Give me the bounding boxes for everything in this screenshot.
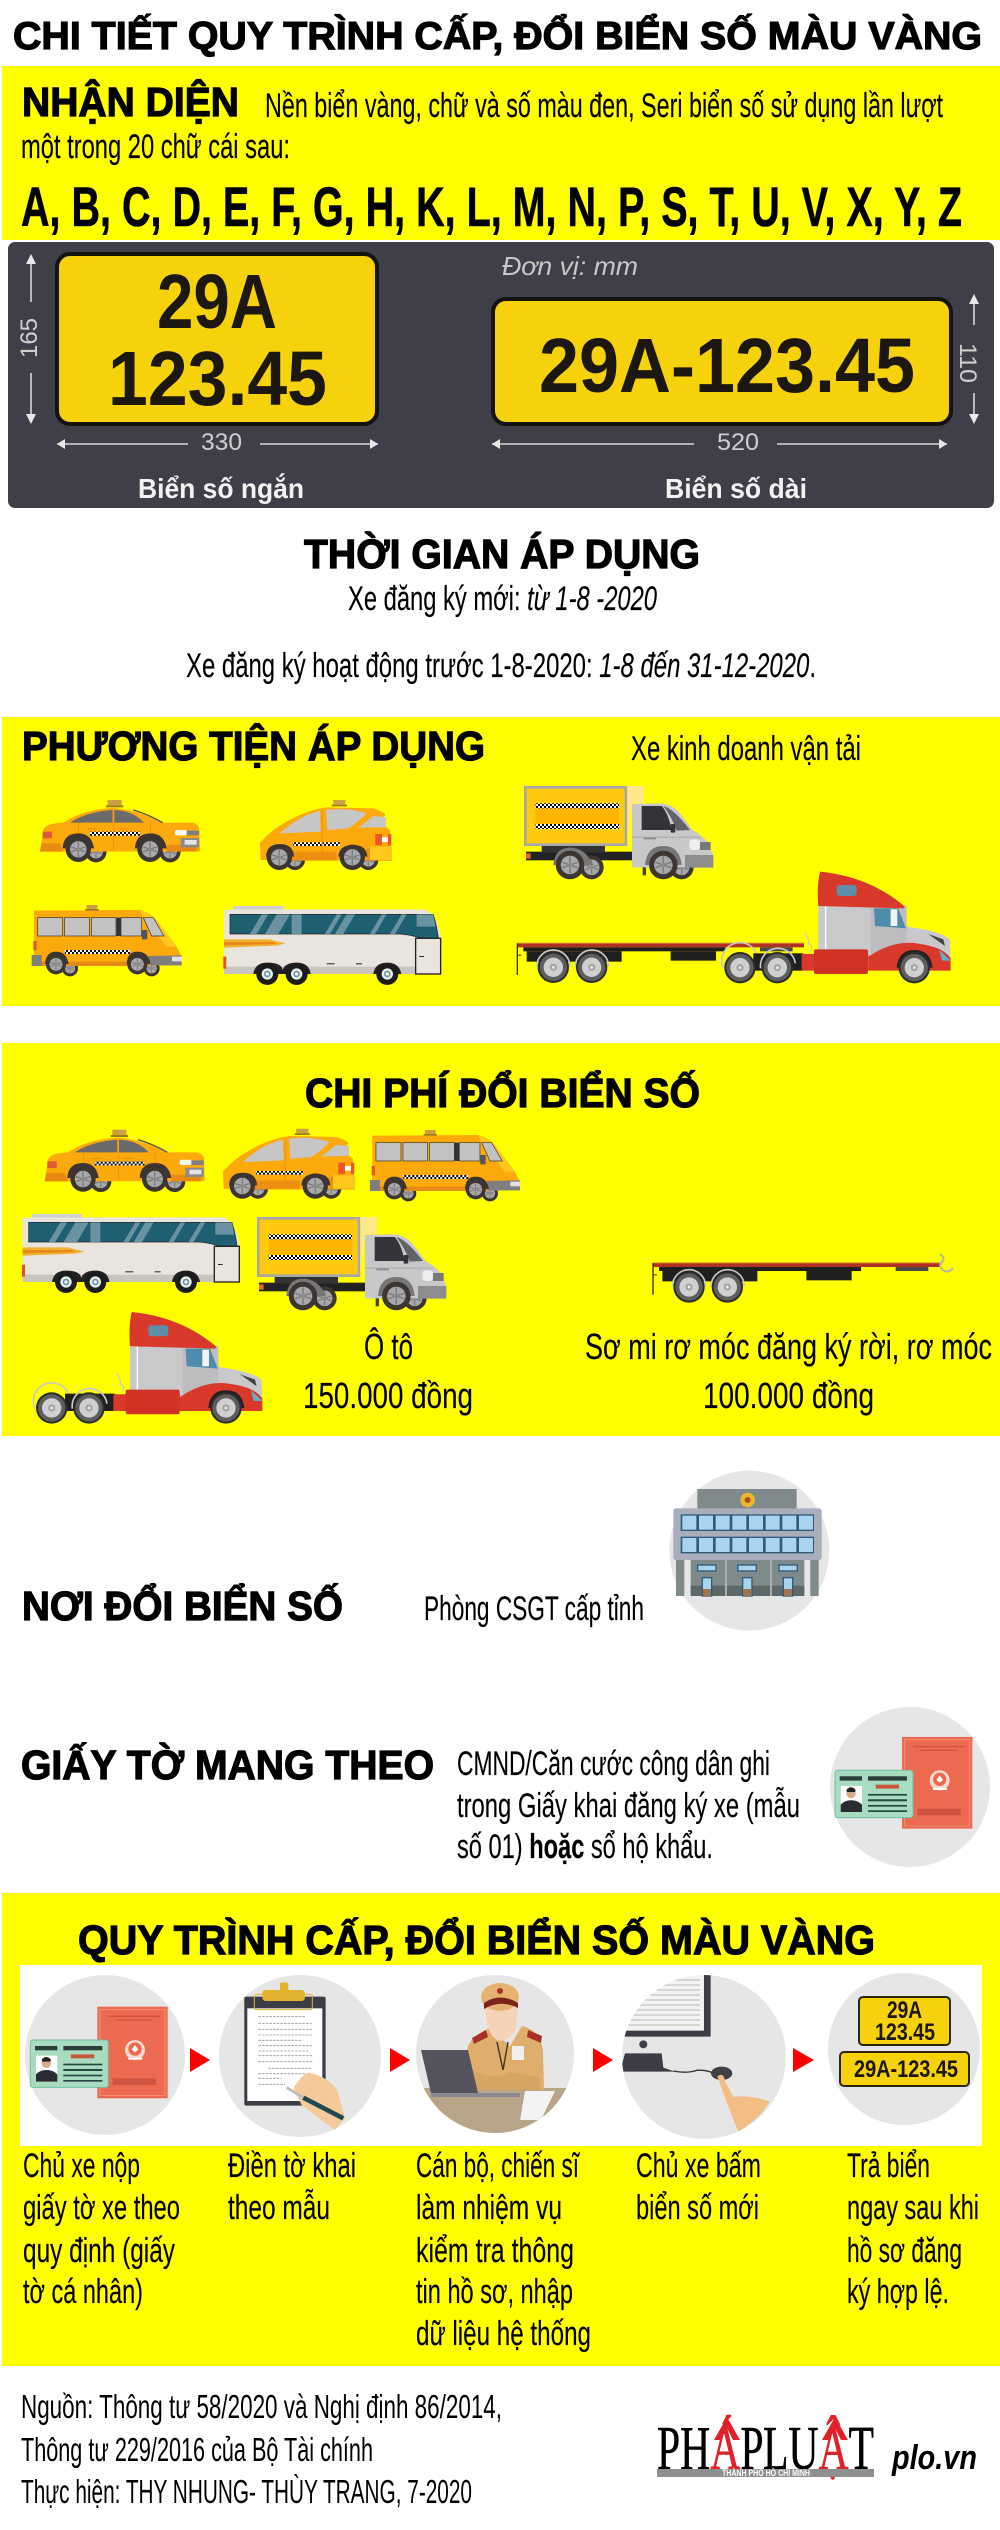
text: step 4: [636, 2147, 761, 2227]
footer: sources and credits: Thực hiện: THY NHUNG- THÙY TRANG, 7-2020: [21, 2473, 472, 2510]
text: step 1: giấy tờ xe theo: [23, 2189, 180, 2227]
step 5 icon: new yellow plates: 123.45: [875, 2019, 935, 2046]
long plate: [493, 299, 951, 424]
text: new registration: Xe đăng ký mới: từ 1-8 -2020: [348, 580, 657, 618]
text: step 4: biển số mới: [636, 2189, 759, 2227]
step 5 icon: new yellow plates: 29A-123.45: [854, 2056, 958, 2083]
text: provincial traffic police: Phòng CSGT cấp tỉnh: [424, 1590, 644, 1628]
heading: applicable vehicles: PHƯƠNG TIỆN ÁP DỤNG: [22, 723, 485, 769]
panel: plate change fees: [2, 1043, 1000, 1436]
text: step 2: Điền tờ khai: [228, 2147, 356, 2185]
dimension: 330: 330: [201, 429, 242, 456]
dimension: 165: 165: [16, 318, 43, 358]
caption: long plate: Biển số dài: [665, 473, 807, 504]
long plate: 29A-123.45: [539, 323, 915, 409]
text: step 3: kiểm tra thông: [416, 2232, 574, 2270]
text: step 3: làm nhiệm vụ: [416, 2189, 562, 2227]
icon: semi truck with trailer: [517, 872, 951, 983]
icon: taxi sedan: [45, 1130, 205, 1192]
heading: effective dates: THỜI GIAN ÁP DỤNG: [304, 531, 700, 577]
text: step 2: theo mẫu: [228, 2189, 330, 2227]
text: documents description: CMND/Căn cước công dân ghi: [457, 1745, 770, 1783]
icon: police building: [669, 1471, 829, 1631]
step 3 icon: officer at laptop: [416, 1975, 574, 2138]
heading: procedure: QUY TRÌNH CẤP, ĐỔI BIỂN SỐ MÀU VÀNG: [78, 1916, 875, 1963]
icon: taxi van: [370, 1130, 520, 1201]
panel: procedure: [2, 1893, 1000, 2366]
text: step 2: [228, 2147, 356, 2227]
heading: identification: NHẬN DIỆN: [22, 79, 239, 125]
step 1 icon: documents: [25, 1975, 185, 2135]
step 5 icon: new yellow plates: [828, 1973, 980, 2125]
dimension: 165: [16, 254, 43, 424]
panel: plate dimensions: [8, 242, 994, 508]
footer: sources and credits: Thông tư 229/2016 của Bộ Tài chính: [21, 2431, 373, 2468]
text: step 1: tờ cá nhân): [23, 2273, 143, 2311]
fee: trailers: 100.000 đồng: [703, 1375, 874, 1416]
text: documents description: trong Giấy khai đăng ký xe (mẫu: [457, 1787, 800, 1825]
section: effective dates: [186, 531, 816, 685]
icon: taxi van: [32, 905, 182, 976]
panel: identification: [2, 66, 1000, 240]
logo: Pháp Luật: PHÁP LUẬT: [657, 2415, 874, 2483]
step 4 icon: pressing the plate button: [620, 1975, 786, 2139]
dimension: 330: [57, 429, 378, 456]
short plate: 29A: [157, 259, 277, 345]
fee: trailers: [585, 1326, 992, 1416]
text: identification description: [21, 87, 943, 166]
fee: cars: Ô tô: [364, 1326, 413, 1367]
text: identification description: một trong 20 chữ cái sau:: [21, 128, 290, 166]
logo: plo.vn: plo.vn: [891, 2439, 977, 2477]
caption: short plate: Biển số ngắn: [138, 473, 304, 504]
arrow: [390, 2048, 410, 2072]
text: transport business vehicles: Xe kinh doanh vận tải: [631, 730, 861, 768]
section: documents to bring: [21, 1707, 990, 1867]
dimension: 520: [492, 429, 947, 456]
icon: taxi sedan: [40, 800, 200, 862]
icon: coach bus: [22, 1214, 239, 1293]
text: earlier registration: Xe đăng ký hoạt động trước 1-8-2020: 1-8 đến 31-12-2020.: [186, 647, 816, 685]
text: step 3: [416, 2147, 591, 2353]
unit label: Đơn vị: mm: [502, 251, 638, 281]
arrow: [793, 2048, 814, 2072]
logo: Pháp Luật: THÀNH PHỐ HỒ CHÍ MINH: [722, 2467, 810, 2478]
heading: where: NƠI ĐỔI BIỂN SỐ: [22, 1582, 343, 1629]
heading: documents: GIẤY TỜ MANG THEO: [21, 1742, 434, 1788]
main title: CHI TIẾT QUY TRÌNH CẤP, ĐỔI BIỂN SỐ MÀU VÀNG: [13, 13, 982, 58]
text: step 5: ký hợp lệ.: [847, 2273, 949, 2311]
text: documents description: [457, 1745, 800, 1866]
heading: fees: CHI PHÍ ĐỔI BIỂN SỐ: [305, 1069, 700, 1116]
text: documents description: số 01) hoặc sổ hộ khẩu.: [457, 1828, 713, 1866]
icon: coach bus: [223, 906, 441, 985]
panel: applicable vehicles: [2, 717, 1000, 1006]
text: step 5: [847, 2147, 979, 2311]
icon: tractor cab: [33, 1312, 262, 1424]
icon: ID card and household book: [830, 1707, 990, 1867]
icon: taxi hatchback: [260, 800, 392, 870]
icon: box truck: [258, 1217, 446, 1310]
arrow: [190, 2048, 210, 2072]
icon: taxi hatchback: [223, 1129, 355, 1199]
icon: box truck: [525, 786, 713, 879]
icon: trailer: [652, 1254, 953, 1303]
step 5 icon: new yellow plates: 29A: [887, 1997, 922, 2024]
short plate: [57, 254, 377, 424]
step 2 icon: filling in the form: [219, 1975, 381, 2137]
dimension: 110: [954, 294, 981, 424]
footer: sources and credits: Nguồn: Thông tư 58/2020 và Nghị định 86/2014,: [21, 2388, 502, 2425]
footer: sources and credits: [21, 2388, 502, 2510]
text: step 1: quy định (giấy: [23, 2232, 175, 2270]
short plate: 123.45: [108, 336, 327, 422]
text: step 4: Chủ xe bấm: [636, 2147, 761, 2185]
fee: cars: 150.000 đồng: [303, 1375, 473, 1416]
text: step 3: Cán bộ, chiến sĩ: [416, 2147, 580, 2185]
text: step 3: dữ liệu hệ thống: [416, 2315, 591, 2353]
text: step 1: Chủ xe nộp: [23, 2147, 140, 2185]
text: step 1: [23, 2147, 180, 2311]
fee: cars: [303, 1326, 473, 1416]
section: where to change plates: [22, 1471, 829, 1631]
text: step 3: tin hồ sơ, nhập: [416, 2273, 573, 2311]
dimension: 520: 520: [717, 429, 759, 456]
dimension: 110: 110: [954, 343, 981, 383]
arrow: [593, 2048, 613, 2072]
text: step 5: Trả biển: [847, 2147, 930, 2185]
